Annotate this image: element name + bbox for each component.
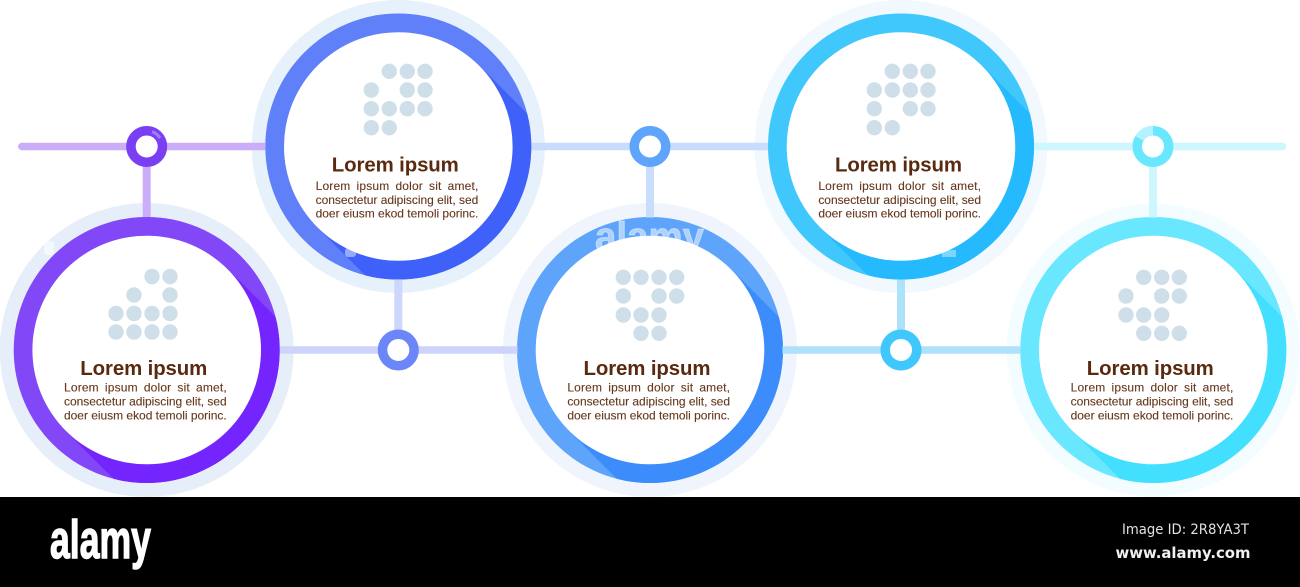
icon: step 3 dots [616, 270, 684, 341]
image id: Image ID: 2R8YA3T [1122, 522, 1249, 538]
heading: step 4: Lorem ipsum [835, 155, 962, 177]
website: www.alamy.com [1116, 544, 1250, 562]
connector lines [18, 143, 1286, 350]
text block: step 5: consectetur adipiscing elit, sed [1071, 395, 1233, 409]
icon: step 5 dots [1118, 270, 1187, 341]
text block: step 4: doer eiusm ekod temoli porinc. [818, 206, 981, 220]
text block: step 1: consectetur adipiscing elit, sed [64, 395, 227, 409]
footer bar [0, 497, 1300, 587]
text block: step 3: Lorem ipsum dolor sit amet, [567, 381, 730, 395]
text block: step 5 [1071, 381, 1233, 422]
text block: step 3: consectetur adipiscing elit, sed [567, 395, 730, 409]
icon: step 1 dots [108, 269, 178, 340]
text block: step 1: doer eiusm ekod temoli porinc. [64, 408, 227, 422]
text block: step 2 [316, 179, 478, 220]
node: cyan ring [1137, 131, 1169, 162]
text block: step 3 [567, 381, 730, 422]
panel: step 3 circle [503, 203, 797, 497]
heading: step 5: Lorem ipsum [1087, 358, 1214, 380]
icon: step 2 dots [364, 64, 433, 135]
text block: step 1 [64, 381, 227, 422]
panel: step 1 circle [0, 203, 294, 497]
panel: step 2 circle [252, 0, 545, 293]
heading: step 1: Lorem ipsum [80, 358, 207, 380]
text block: step 5: Lorem ipsum dolor sit amet, [1071, 381, 1233, 395]
watermark traces on rings [44, 241, 956, 257]
panel: step 4 circle [754, 0, 1048, 293]
text block: step 4: consectetur adipiscing elit, sed [818, 193, 981, 207]
panel: step 5 circle [1007, 204, 1300, 496]
heading: step 3: Lorem ipsum [584, 358, 710, 380]
node: purple ring [131, 131, 162, 162]
icon: step 4 dots [867, 64, 936, 135]
text block: step 2: Lorem ipsum dolor sit amet, [316, 179, 478, 193]
text block: step 2: doer eiusm ekod temoli porinc. [316, 206, 478, 220]
watermark: faint alamy on blue ring: alamy [595, 215, 705, 259]
logo: alamy: alamy [50, 510, 151, 570]
node: sky ring [885, 334, 917, 366]
text block: step 1: Lorem ipsum dolor sit amet, [64, 381, 227, 395]
text block: step 4: Lorem ipsum dolor sit amet, [818, 179, 981, 193]
node: blue ring [634, 131, 666, 162]
text block: step 5: doer eiusm ekod temoli porinc. [1071, 408, 1233, 422]
text block: step 3: doer eiusm ekod temoli porinc. [567, 408, 730, 422]
node: indigo ring [383, 334, 414, 366]
text block: step 4 [818, 179, 981, 220]
text block: step 2: consectetur adipiscing elit, sed [316, 193, 478, 207]
heading: step 2: Lorem ipsum [332, 155, 459, 177]
